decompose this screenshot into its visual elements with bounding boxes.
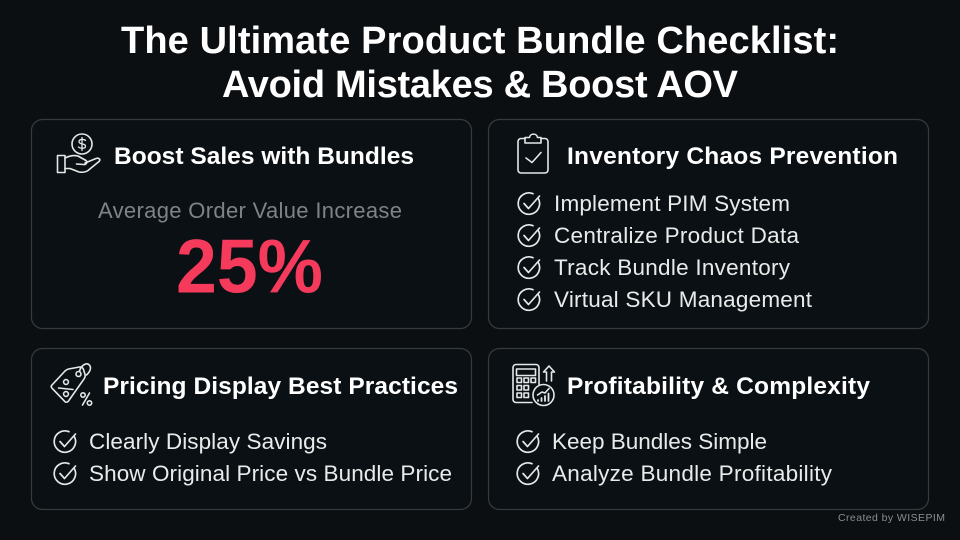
checklist: Implement PIM System xyxy=(554,191,790,216)
icon: calculator with chart xyxy=(513,364,554,406)
subheading: Average Order Value Increase xyxy=(98,198,402,223)
icon: hand holding dollar coin xyxy=(58,134,100,172)
checklist xyxy=(517,429,833,486)
panel: pricing xyxy=(32,348,472,510)
checklist: Virtual SKU Management xyxy=(554,287,813,312)
icon: clipboard xyxy=(518,134,548,173)
heading: Boost Sales with Bundles xyxy=(114,143,414,170)
checklist: Show Original Price vs Bundle Price xyxy=(89,461,452,486)
heading: Pricing Display Best Practices xyxy=(103,373,458,400)
icon: price tag with percent xyxy=(51,364,92,405)
checklist: Analyze Bundle Profitability xyxy=(552,461,833,486)
checklist xyxy=(518,191,813,312)
big stat: 25% xyxy=(176,224,323,310)
title: The Ultimate Product Bundle Checklist: xyxy=(121,20,839,62)
panel: inventory xyxy=(488,120,928,328)
title: Avoid Mistakes & Boost AOV xyxy=(222,64,739,106)
checklist: Clearly Display Savings xyxy=(89,429,327,454)
title xyxy=(121,20,839,106)
checklist: Track Bundle Inventory xyxy=(554,255,791,280)
panel: profitability xyxy=(488,348,928,510)
panel: boost sales xyxy=(32,120,472,328)
checklist xyxy=(54,429,452,486)
credit: Created by WISEPIM xyxy=(838,512,945,524)
checklist: Keep Bundles Simple xyxy=(552,429,767,454)
checklist: Centralize Product Data xyxy=(554,223,799,248)
heading: Inventory Chaos Prevention xyxy=(567,143,898,170)
heading: Profitability & Complexity xyxy=(567,373,870,400)
